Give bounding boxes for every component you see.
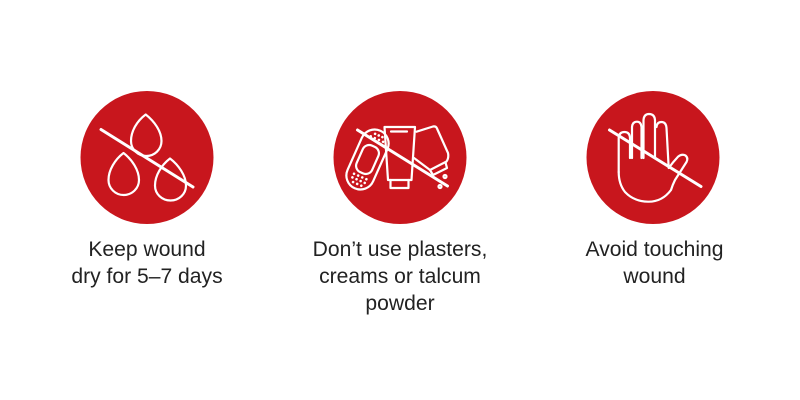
caption: keep wound dry: Keep wound — [88, 238, 206, 261]
panel: avoid touching wound — [586, 91, 724, 288]
caption: avoid touching wound: Avoid touching — [586, 238, 724, 261]
panel: keep wound dry — [71, 91, 223, 288]
caption: no plasters or creams: powder — [365, 292, 435, 315]
caption: no plasters or creams: Don’t use plasters, — [313, 238, 487, 261]
caption: keep wound dry: dry for 5–7 days — [71, 265, 223, 288]
caption: avoid touching wound: wound — [622, 265, 686, 288]
icon: crossed-out plaster, tube and bottle — [334, 91, 466, 224]
icon: crossed-out water drops — [80, 91, 214, 224]
panel: no plasters or creams — [313, 91, 487, 315]
icon: crossed-out hand — [586, 91, 720, 224]
caption: no plasters or creams: creams or talcum — [319, 265, 481, 288]
